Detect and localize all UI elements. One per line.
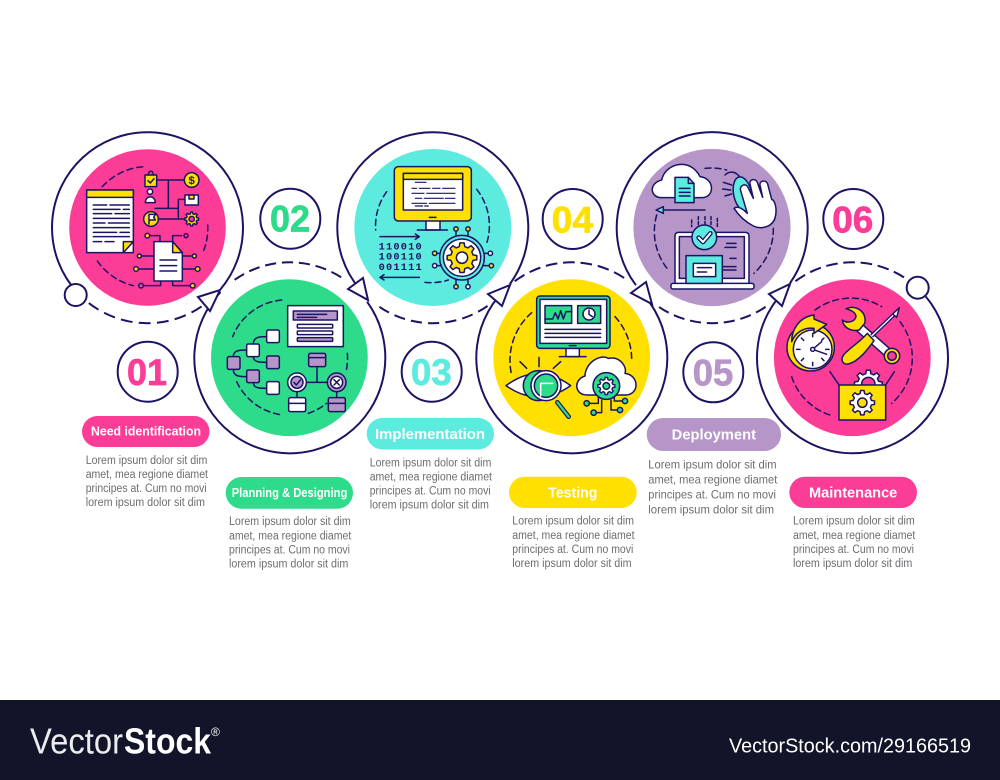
number badge 05 <box>683 342 743 402</box>
number badge 06 <box>823 189 883 249</box>
icon: documents and requirements network <box>87 167 208 288</box>
icon: flow chart and wireframe <box>227 300 348 415</box>
heading pill: implementation <box>367 418 494 450</box>
text block: step 2: lorem ipsum dolor sit dim <box>229 558 348 570</box>
disc: step 1 <box>69 149 226 306</box>
heading pill: deployment <box>647 418 781 451</box>
footer logo: Vector <box>30 720 123 762</box>
panel: step 1 need identification <box>13 93 282 509</box>
text block: step 3: lorem ipsum dolor sit dim <box>370 500 489 512</box>
arrow: step 3 to step 4 <box>488 285 510 306</box>
number badge 04 <box>543 189 603 249</box>
icon: monitor, binary code and gear <box>376 167 493 289</box>
text block: step 2: principes at. Cum no movi <box>229 544 350 556</box>
ring start marker <box>65 284 87 306</box>
disc: step 6 <box>774 279 931 436</box>
text block: step 2: amet, mea regione diamet <box>229 530 352 542</box>
arrow: step 5 to step 6 <box>769 284 790 306</box>
text block: step 2 <box>229 516 352 570</box>
text block: step 4: principes at. Cum no movi <box>512 544 633 556</box>
panel: step 5 deployment <box>578 94 846 516</box>
text block: step 5: Lorem ipsum dolor sit dim <box>648 457 777 471</box>
arrow: step 4 to step 5 <box>631 282 652 304</box>
number badge 02: 02 <box>270 199 310 240</box>
heading pill: maintenance <box>789 477 917 508</box>
text block: step 3: principes at. Cum no movi <box>370 486 491 498</box>
text block: step 3 <box>370 457 493 512</box>
text block: step 4: lorem ipsum dolor sit dim <box>512 558 632 570</box>
text block: step 1: lorem ipsum dolor sit dim <box>86 497 205 509</box>
number badge 02 <box>260 189 320 249</box>
footer banner <box>0 700 1000 780</box>
text block: step 5: lorem ipsum dolor sit dim <box>648 502 774 516</box>
text block: step 3: amet, mea regione diamet <box>370 472 493 484</box>
text block: step 5 <box>648 457 778 516</box>
text block: step 4: Lorem ipsum dolor sit dim <box>512 516 634 528</box>
icon: monitor, binary code and gear: 110010 <box>379 241 422 253</box>
number badge 01: 01 <box>127 352 167 393</box>
text block: step 6: principes at. Cum no movi <box>793 544 914 556</box>
heading pill: testing: Testing <box>548 486 597 502</box>
heading pill: deployment: Deployment <box>672 428 756 444</box>
disc: step 2 <box>211 279 368 436</box>
heading pill: need identification <box>82 416 210 447</box>
icon: documents and requirements network: $ <box>189 175 196 187</box>
text block: step 1 <box>86 455 209 509</box>
panel: step 4 testing <box>438 189 705 570</box>
icon: monitor, binary code and gear: 001111 <box>379 262 422 274</box>
panel: step 3 implementation <box>298 93 567 512</box>
footer logo <box>30 720 220 762</box>
text block: step 2: Lorem ipsum dolor sit dim <box>229 516 351 528</box>
arrow: step 2 to step 3 <box>348 278 368 300</box>
panel: step 2 planning and designing <box>156 189 423 570</box>
arrow: step 1 to step 2 <box>198 290 220 311</box>
text block: step 4: amet, mea regione diamet <box>512 530 635 542</box>
text block: step 1: amet, mea regione diamet <box>86 469 209 481</box>
text block: step 5: amet, mea regione diamet <box>648 472 778 486</box>
panel: step 6 maintenance <box>718 189 987 570</box>
heading pill: planning and designing: Planning & Designing <box>232 485 347 500</box>
icon: clock, wrench, screwdriver and toolbox <box>787 298 912 420</box>
footer logo: Stock <box>124 720 212 762</box>
heading pill: maintenance: Maintenance <box>809 486 897 502</box>
text block: step 5: principes at. Cum no movi <box>648 487 776 501</box>
number badge 05: 05 <box>693 353 733 394</box>
text block: step 6: Lorem ipsum dolor sit dim <box>793 516 915 528</box>
number badge 03 <box>402 342 462 402</box>
icon: monitor, binary code and gear: 100110 <box>379 252 422 264</box>
heading pill: testing <box>509 477 637 508</box>
disc: step 4 <box>493 279 650 436</box>
text block: step 1: Lorem ipsum dolor sit dim <box>86 455 207 467</box>
text block: step 6: amet, mea regione diamet <box>793 530 916 542</box>
heading pill: need identification: Need identification <box>91 424 201 438</box>
text block: step 6 <box>793 516 916 570</box>
disc: step 3 <box>354 149 511 306</box>
heading pill: planning and designing <box>226 477 353 509</box>
number badge 01 <box>118 342 178 402</box>
number badge 04: 04 <box>552 199 594 240</box>
icon: cloud upload, hand on mouse and laptop <box>652 164 776 289</box>
number badge 06: 06 <box>832 199 873 240</box>
text block: step 6: lorem ipsum dolor sit dim <box>793 558 912 570</box>
disc: step 5 <box>633 149 791 306</box>
text block: step 1: principes at. Cum no movi <box>86 483 207 495</box>
ring end marker <box>907 277 929 299</box>
heading pill: implementation: Implementation <box>375 427 485 443</box>
icon: monitor, eye with magnifier and cloud <box>506 296 636 417</box>
footer image id: VectorStock.com/29166519 <box>729 736 971 758</box>
text block: step 3: Lorem ipsum dolor sit dim <box>370 457 491 469</box>
footer logo: ® <box>211 725 220 739</box>
text block: step 4 <box>512 516 635 570</box>
number badge 03: 03 <box>411 352 452 393</box>
